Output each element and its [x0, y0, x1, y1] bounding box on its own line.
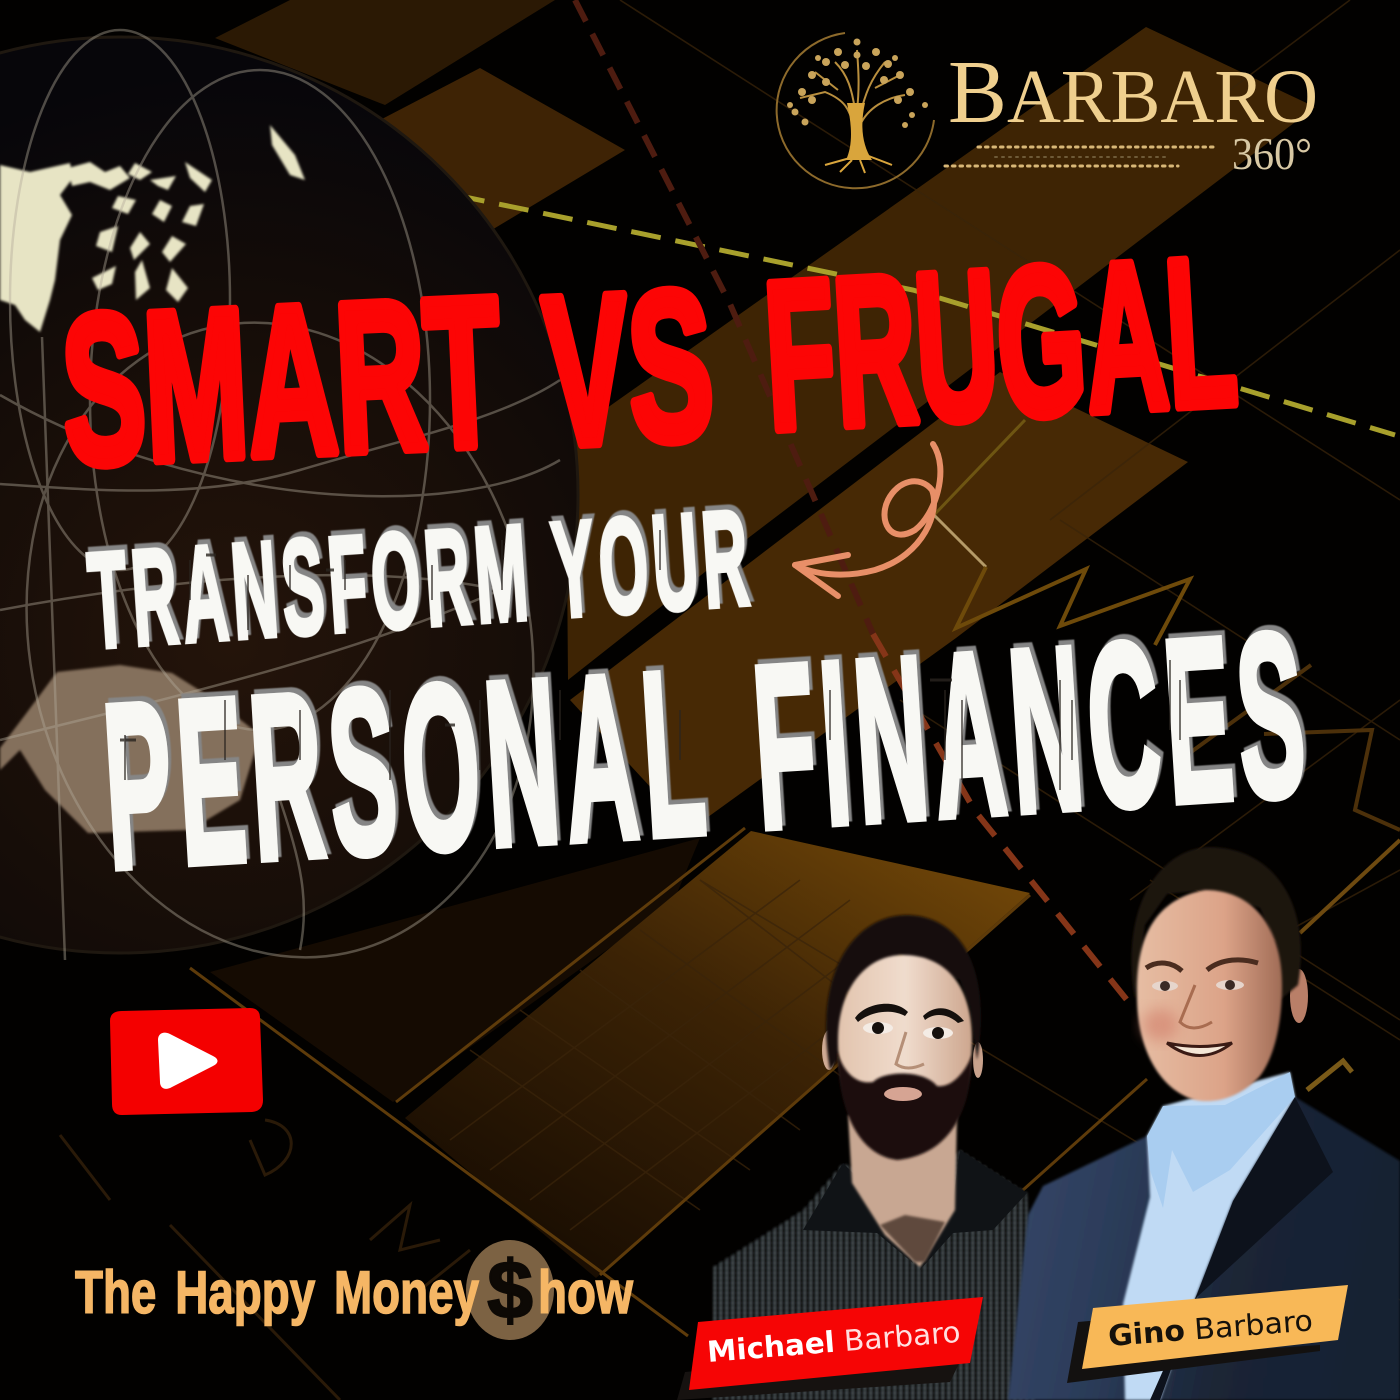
- logo: Barbaro 360: [777, 33, 1318, 188]
- continent: lower tan landmass: [0, 665, 260, 833]
- hair: [826, 915, 981, 1070]
- face: [838, 955, 972, 1142]
- shirt collar: [1147, 1072, 1295, 1208]
- portrait: Michael Barbaro: [712, 915, 1035, 1400]
- portrait: Gino Barbaro: [1008, 847, 1400, 1400]
- lapel: [1150, 1097, 1333, 1400]
- icon: YouTube play button: [110, 1008, 263, 1115]
- name tag: Michael Barbaro: [677, 1297, 983, 1400]
- dashed red trend line: [575, 0, 1135, 1010]
- grunge scratches on lettering: [120, 530, 1180, 790]
- title: SMART VS FRUGAL: VS: [539, 245, 718, 490]
- eyes and brows: [855, 1004, 964, 1068]
- title: SMART VS FRUGAL: SMART: [57, 252, 506, 509]
- facial features: [1146, 960, 1258, 1056]
- show name: The Happy Money Show: The Happy Money: [75, 1259, 479, 1326]
- shirt: [712, 1150, 1035, 1400]
- shirt: [1123, 1072, 1295, 1400]
- logo: Barbaro 360: BARBARO: [948, 43, 1318, 142]
- neck and face: [1137, 890, 1282, 1101]
- name tag: Michael Barbaro: Michael Barbaro: [706, 1315, 962, 1369]
- dashed yellow trend line: [455, 195, 1395, 435]
- name tag: Gino Barbaro: Gino Barbaro: [1107, 1303, 1314, 1353]
- arrow: hand-drawn curl: [795, 444, 940, 596]
- beard: [837, 1050, 972, 1160]
- hair: [1131, 847, 1301, 1000]
- chest and neck: [848, 1115, 957, 1267]
- ears: [822, 1030, 836, 1070]
- ear: [1290, 969, 1308, 1023]
- icon: tree in circle: [777, 33, 934, 188]
- show name: The Happy Money Show: how: [538, 1259, 633, 1326]
- jacket: [1008, 1097, 1400, 1400]
- icon: dollar coin: [466, 1240, 554, 1340]
- globe: [0, 30, 591, 1005]
- shirt collar: [803, 1150, 1027, 1270]
- icon: dollar coin: $: [487, 1245, 533, 1336]
- name tag: Gino Barbaro: [1067, 1285, 1348, 1383]
- logo: Barbaro 360: 360°: [1232, 128, 1312, 179]
- faint chart scribbles: [60, 1120, 470, 1400]
- show name: The Happy Money Show: [75, 1240, 633, 1340]
- title: SMART VS FRUGAL: [57, 213, 1242, 509]
- continent: upper cream landmass: [0, 125, 305, 332]
